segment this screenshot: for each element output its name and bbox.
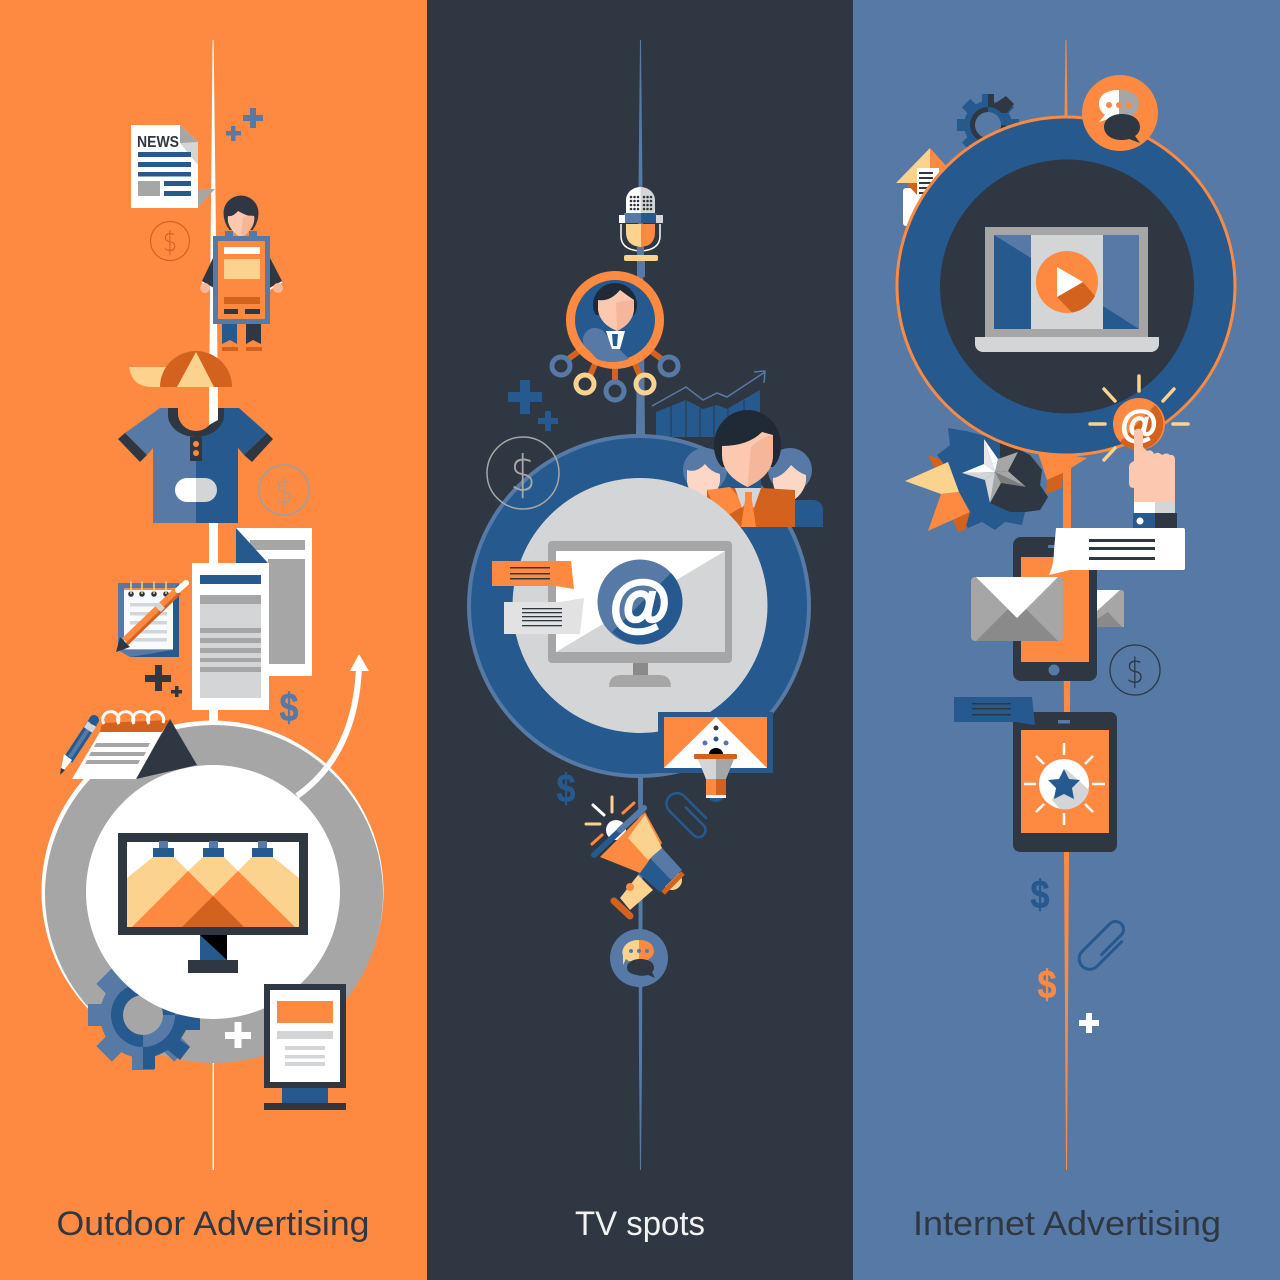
chart: big blue ring [469, 436, 809, 776]
panel: internet advertising [853, 0, 1280, 1280]
panel: tv spots [427, 0, 853, 1280]
icon: dollar coin: $ [1126, 652, 1144, 692]
spine line lower [1063, 450, 1071, 1170]
icon: dollar coin gray: $ [275, 472, 293, 512]
icon: orange speech bubble [492, 561, 574, 589]
icon: pointing hand [1129, 428, 1177, 528]
icon: chat circle [610, 929, 668, 987]
icon: billboard [118, 833, 308, 973]
icon: gear [88, 960, 200, 1070]
icon: dollar coin [487, 437, 559, 509]
icon: mail arrow [896, 148, 948, 226]
icon: smartphone [1013, 537, 1097, 681]
icon: dollar coin orange [150, 222, 190, 260]
icon: newspaper: NEWS [137, 134, 179, 151]
icon: white speech bubble [1049, 528, 1185, 575]
icon: paperclip [1075, 918, 1130, 974]
icon: laptop with play [975, 227, 1159, 352]
icon: at button with rays: @ [1120, 404, 1158, 446]
icon: calendar and pencil [60, 712, 197, 779]
icon: dollar sign: $ [557, 765, 576, 811]
icon: white plus [225, 1022, 251, 1048]
icon: at button with rays [1090, 376, 1188, 460]
title: outdoor advertising: Outdoor Advertising [56, 1205, 370, 1243]
spine segment [637, 261, 645, 277]
icon: team of people [683, 410, 823, 527]
icon: dollar coin orange: $ [163, 224, 177, 258]
icon: person network [552, 276, 678, 400]
panel: outdoor advertising [0, 0, 427, 1280]
chart: outer gray ring [45, 725, 383, 1063]
icon: sandwich board person [200, 196, 283, 351]
icon: envelope small [1097, 590, 1124, 627]
icon: microphone [619, 187, 663, 261]
icon: dollar coin [1110, 645, 1160, 695]
icon: dollar coin gray [259, 465, 309, 515]
icon: monitor with at sign: @ [610, 569, 670, 638]
icon: dollar coin: $ [510, 445, 536, 503]
icon: star [962, 439, 1026, 503]
outer white rim [42, 720, 384, 1062]
icon: chat circle [1082, 75, 1158, 151]
icon: tablet with star [1013, 712, 1117, 852]
icon: presentation with funnel [658, 712, 773, 802]
spine line [636, 40, 645, 440]
icon: folded leaflet [192, 528, 312, 710]
icon: paperclip [662, 789, 713, 840]
inner white circle [86, 765, 340, 1019]
inner gray circle [512, 478, 768, 733]
spine line lower [638, 770, 643, 1170]
icon: cap [129, 351, 232, 387]
icon: monitor with at sign [548, 541, 732, 687]
icon: newspaper [131, 125, 215, 208]
spine line top [1064, 40, 1068, 120]
icon: blue speech bubble [954, 697, 1035, 725]
chart: big blue ring [897, 117, 1235, 455]
spine stub to ring [210, 710, 216, 722]
icon: gray speech bubble [504, 598, 584, 634]
icon: plus signs [226, 108, 263, 141]
icon: dollar sign: $ [280, 684, 299, 730]
icon: dollar sign blue: $ [1031, 871, 1050, 917]
icon: dark plus signs [145, 665, 182, 697]
chart: growth bars and line [652, 371, 765, 437]
icon: kiosk display [264, 984, 346, 1110]
icon: dollar sign orange: $ [1038, 961, 1057, 1007]
icon: notepad with pen [116, 581, 186, 657]
icon: t-shirt [118, 408, 273, 523]
arrow [297, 654, 369, 796]
inner dark circle [940, 160, 1194, 414]
icon: blue plus signs [508, 380, 558, 431]
icon: gear [957, 94, 1019, 156]
title: internet advertising: Internet Advertising [913, 1205, 1221, 1243]
icon: white plus [1079, 1013, 1099, 1033]
icon: envelope large [971, 577, 1063, 641]
icon: badge with ribbons [905, 428, 1087, 532]
title: tv spots: TV spots [575, 1205, 705, 1243]
spine line [209, 40, 218, 1170]
icon: megaphone [586, 797, 683, 916]
